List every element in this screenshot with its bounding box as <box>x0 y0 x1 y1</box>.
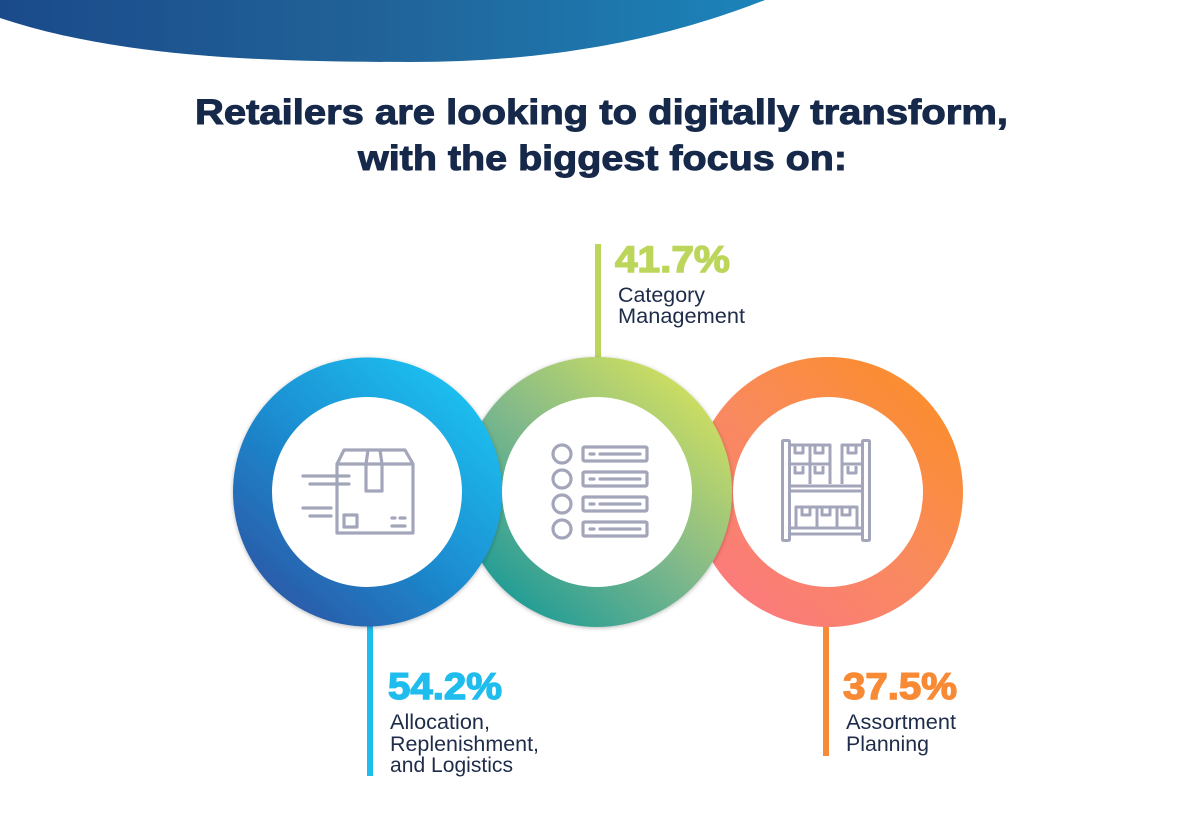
stat: assortment planning <box>843 666 957 756</box>
stat: category management: Management <box>618 305 745 328</box>
stat: allocation: Replenishment, <box>390 733 539 756</box>
connector line: allocation <box>367 620 373 776</box>
stat: allocation: 54.2% <box>388 666 502 707</box>
icon: moving box <box>303 450 413 533</box>
stat: category management: Category <box>618 284 706 307</box>
top wave banner <box>0 0 765 62</box>
stat: allocation: and Logistics <box>390 754 513 777</box>
stat: allocation <box>388 666 539 777</box>
stat: allocation: Allocation, <box>390 711 490 734</box>
ring: allocation <box>233 358 502 626</box>
icon: warehouse shelf <box>782 440 870 540</box>
stat: category management: 41.7% <box>615 239 730 280</box>
ring centre: category management <box>502 397 692 587</box>
ring centre: assortment planning <box>733 397 923 587</box>
connector line: assortment <box>823 620 829 756</box>
connector line: category management <box>595 244 601 364</box>
title: Retailers are looking to digitally transform, <box>195 93 1008 132</box>
stat: assortment planning: 37.5% <box>843 666 957 707</box>
stat: assortment planning: Planning <box>846 733 929 756</box>
stat: category management <box>615 239 745 328</box>
ring: category management <box>462 357 732 627</box>
stat: assortment planning: Assortment <box>846 711 956 734</box>
title <box>195 93 1008 178</box>
icon: checklist <box>553 445 647 538</box>
ring: assortment planning <box>693 357 963 627</box>
title: with the biggest focus on: <box>357 139 847 178</box>
ring centre: allocation <box>272 397 462 587</box>
